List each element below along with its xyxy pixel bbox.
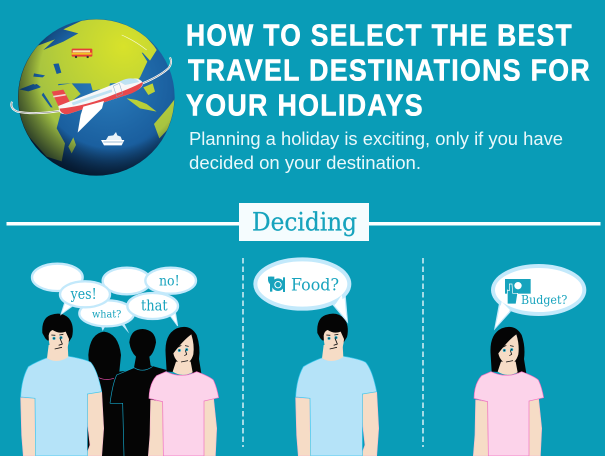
title	[186, 18, 591, 122]
section heading: Deciding: Deciding	[252, 208, 357, 236]
speech bubble: Food?	[255, 259, 349, 322]
subtitle: decided on your destination.	[189, 152, 421, 173]
speech bubbles: no!	[159, 273, 180, 289]
speech bubble: Budget?: Budget?	[521, 293, 567, 307]
speech bubbles: that	[141, 298, 168, 315]
speech bubble: Budget?	[493, 266, 584, 328]
speech bubbles: yes!	[70, 286, 97, 303]
subtitle: Planning a holiday is exciting, only if you have	[189, 128, 563, 149]
person: man in blue shirt	[21, 314, 104, 456]
section heading: Deciding	[6, 203, 600, 241]
icon: ship	[101, 132, 124, 145]
title: YOUR HOLIDAYS	[186, 88, 424, 122]
speech bubble: Food?: Food?	[291, 275, 339, 294]
person: woman in pink shirt	[473, 327, 544, 456]
icon: hand holding banknote	[505, 279, 531, 304]
panel: group of people talking	[21, 264, 219, 456]
speech bubbles	[32, 264, 196, 334]
person: woman in pink shirt	[148, 327, 219, 456]
panel: man thinking about food	[255, 259, 379, 456]
subtitle	[189, 128, 563, 173]
silhouette: woman behind	[87, 332, 133, 456]
silhouette: man behind	[110, 329, 167, 456]
icon: aeroplane	[52, 78, 143, 133]
icon: plate and cutlery	[268, 277, 285, 292]
icon: bus	[72, 49, 92, 58]
person: man in blue shirt	[296, 314, 379, 456]
dashed dividers	[243, 258, 423, 447]
panel: woman thinking about budget	[473, 266, 584, 456]
icon: globe with plane	[11, 18, 177, 176]
icon: orbit trail	[11, 57, 171, 113]
speech bubbles: what?	[92, 308, 122, 321]
